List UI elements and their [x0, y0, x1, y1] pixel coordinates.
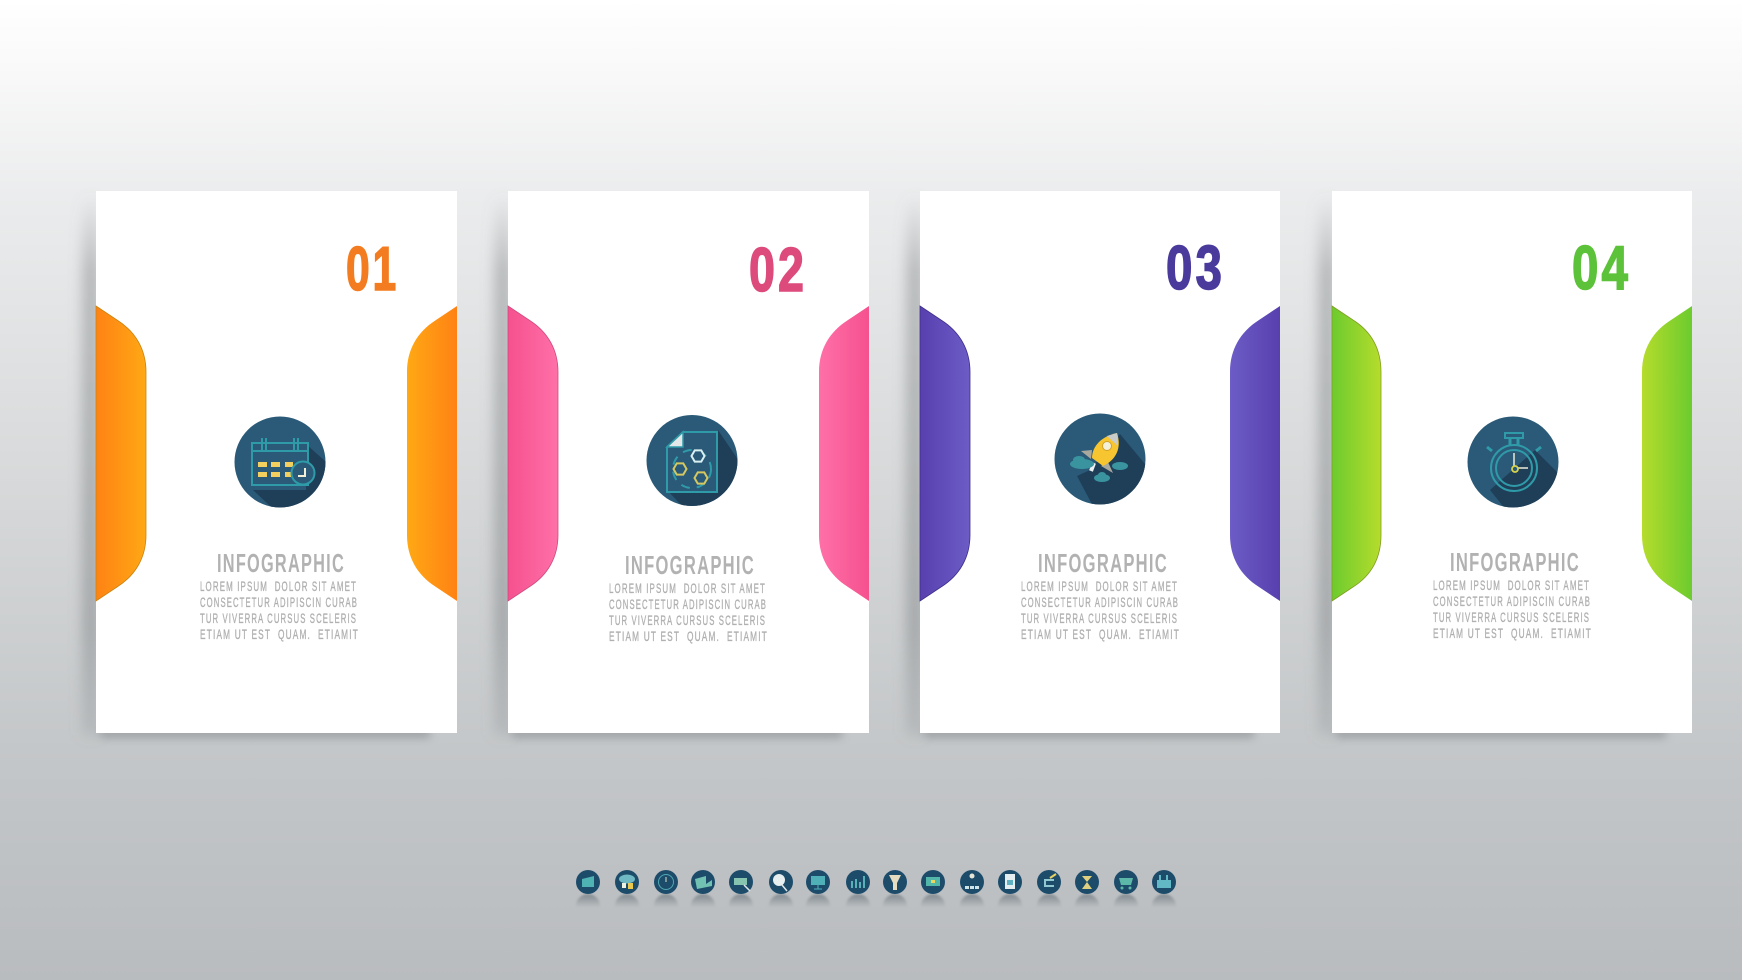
icon: document with hexagons	[646, 415, 738, 506]
text block: ETIAM UT EST QUAM. ETIAMIT	[1021, 626, 1180, 642]
text block: ETIAM UT EST QUAM. ETIAMIT	[1433, 625, 1592, 641]
small icon 2	[615, 870, 639, 918]
icon: stopwatch	[1468, 416, 1558, 508]
icon: rocket	[1054, 414, 1146, 504]
text block	[200, 548, 359, 642]
small icon 13	[1037, 870, 1061, 918]
left purple tab	[920, 306, 970, 601]
text block: LOREM IPSUM DOLOR SIT AMET	[1433, 577, 1590, 593]
small icon 7	[806, 870, 830, 918]
text block: INFOGRAPHIC	[1038, 548, 1168, 578]
small icon 14	[1075, 870, 1099, 918]
small icon 11	[960, 870, 984, 918]
small icon 15	[1114, 870, 1138, 918]
text block: CONSECTETUR ADIPISCIN CURAB	[200, 594, 358, 610]
small icon 1	[576, 870, 600, 918]
small icon 5	[729, 870, 753, 918]
text block: CONSECTETUR ADIPISCIN CURAB	[1021, 594, 1179, 610]
text block: TUR VIVERRA CURSUS SCELERIS	[609, 612, 766, 628]
small icon 8	[846, 870, 870, 918]
left pink tab	[508, 306, 558, 601]
small icon 10	[921, 870, 945, 918]
left green tab	[1332, 306, 1381, 601]
text block: CONSECTETUR ADIPISCIN CURAB	[609, 596, 767, 612]
text block: LOREM IPSUM DOLOR SIT AMET	[609, 580, 766, 596]
number 04: 04	[1572, 234, 1631, 303]
number 02: 02	[749, 236, 807, 305]
small icon 9	[883, 870, 907, 918]
text block	[1433, 547, 1592, 641]
number 03: 03	[1166, 234, 1225, 303]
right green tab	[1642, 306, 1692, 601]
text block	[1021, 548, 1180, 642]
text block: TUR VIVERRA CURSUS SCELERIS	[1433, 609, 1590, 625]
icon row	[576, 870, 1176, 918]
right orange tab	[407, 306, 457, 601]
text block: INFOGRAPHIC	[217, 548, 345, 578]
text block: INFOGRAPHIC	[625, 550, 755, 580]
small icon 12	[998, 870, 1022, 918]
right purple tab	[1230, 306, 1280, 601]
card 1	[83, 191, 457, 738]
text block: TUR VIVERRA CURSUS SCELERIS	[1021, 610, 1178, 626]
right pink tab	[819, 306, 869, 601]
icon: calendar	[234, 416, 326, 508]
small icon 16	[1152, 870, 1176, 918]
text block: INFOGRAPHIC	[1450, 547, 1580, 577]
small icon 4	[691, 870, 715, 918]
text block: ETIAM UT EST QUAM. ETIAMIT	[200, 626, 359, 642]
text block	[609, 550, 768, 644]
text block: LOREM IPSUM DOLOR SIT AMET	[1021, 578, 1178, 594]
small icon 6	[769, 870, 793, 918]
text block: CONSECTETUR ADIPISCIN CURAB	[1433, 593, 1591, 609]
left orange tab	[96, 306, 146, 601]
card 4	[1319, 191, 1692, 738]
text block: LOREM IPSUM DOLOR SIT AMET	[200, 578, 357, 594]
card 2	[495, 191, 869, 738]
small icon 3	[654, 870, 678, 918]
text block: ETIAM UT EST QUAM. ETIAMIT	[609, 628, 768, 644]
number 01: 01	[346, 235, 399, 304]
text block: TUR VIVERRA CURSUS SCELERIS	[200, 610, 357, 626]
card 3	[907, 191, 1280, 738]
